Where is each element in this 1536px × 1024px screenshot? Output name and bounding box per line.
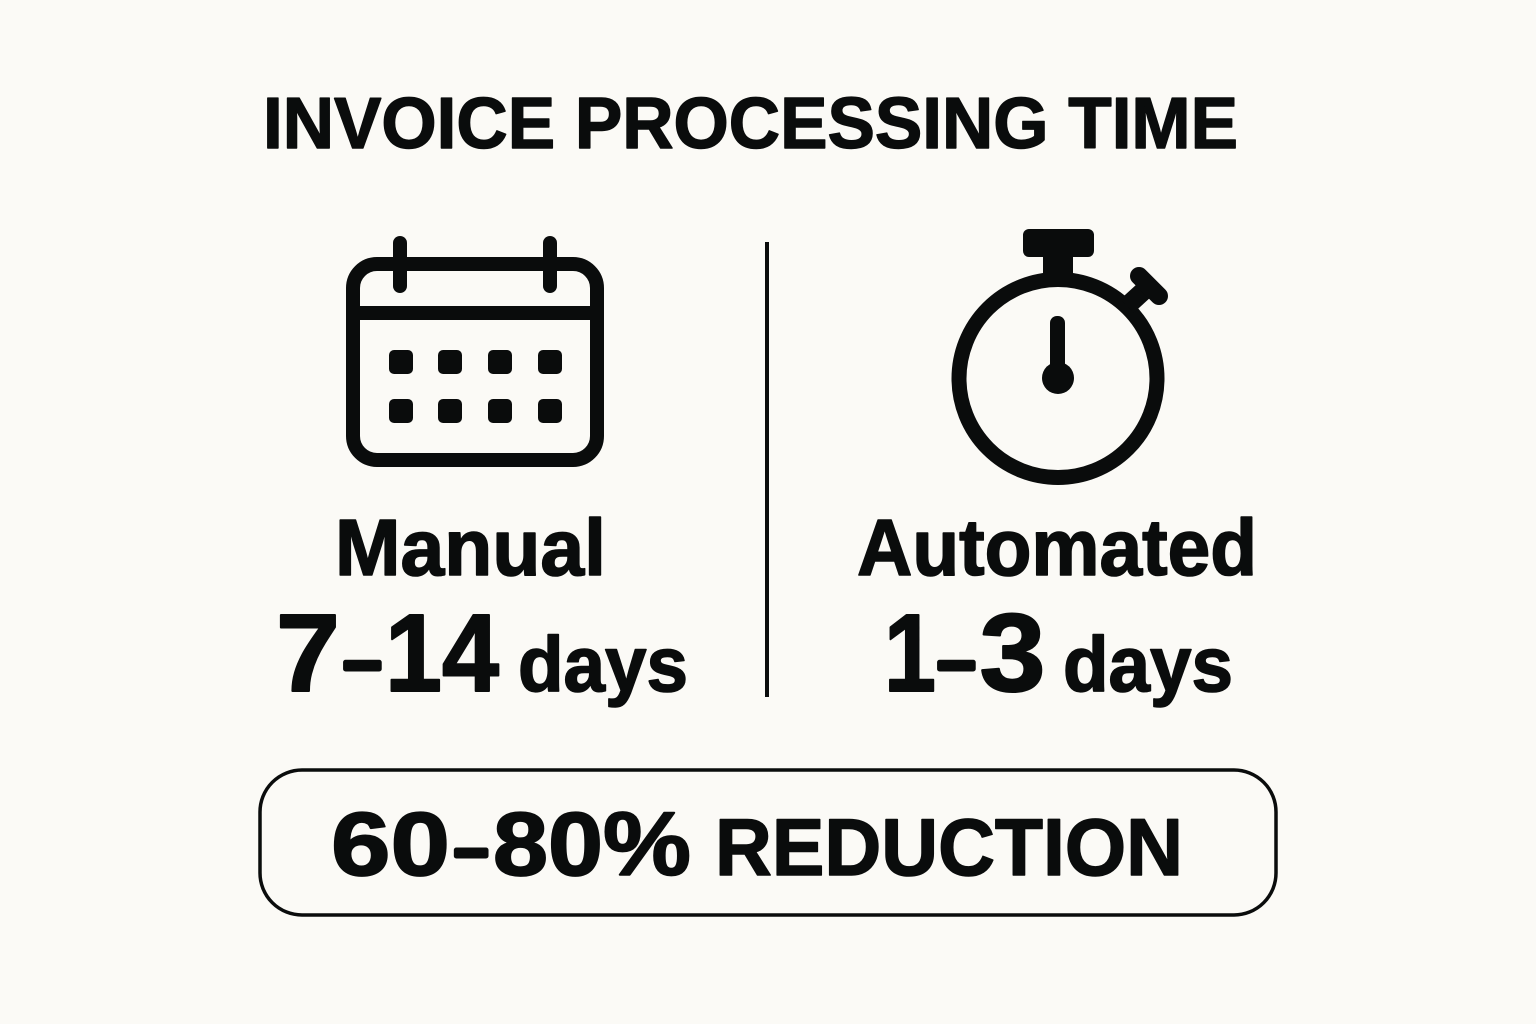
value: 7–14 days: – — [344, 623, 381, 699]
callout: reduction: 80% — [493, 795, 691, 895]
vertical divider — [765, 242, 769, 697]
value: 1–3 days: 3 — [980, 592, 1046, 715]
callout: reduction: 60 — [331, 795, 450, 895]
value: 1–3 days: days — [1063, 620, 1233, 708]
value: 1–3 days: 1 — [884, 592, 936, 715]
label: Automated: Automated — [857, 503, 1257, 592]
callout: reduction: – — [454, 815, 488, 882]
callout: reduction: REDUCTION — [715, 803, 1183, 893]
value: 7–14 days — [276, 592, 688, 715]
icon: stopwatch — [959, 229, 1159, 478]
value: 7–14 days: 7 — [276, 592, 340, 715]
value: 7–14 days: days — [518, 620, 688, 708]
icon: calendar — [350, 236, 600, 460]
value: 1–3 days — [884, 592, 1233, 715]
label: Manual: Manual — [335, 503, 606, 592]
value: 7–14 days: 14 — [385, 592, 499, 715]
callout: reduction — [260, 770, 1276, 915]
value: 1–3 days: – — [938, 623, 975, 699]
title: INVOICE PROCESSING TIME — [263, 84, 1238, 164]
